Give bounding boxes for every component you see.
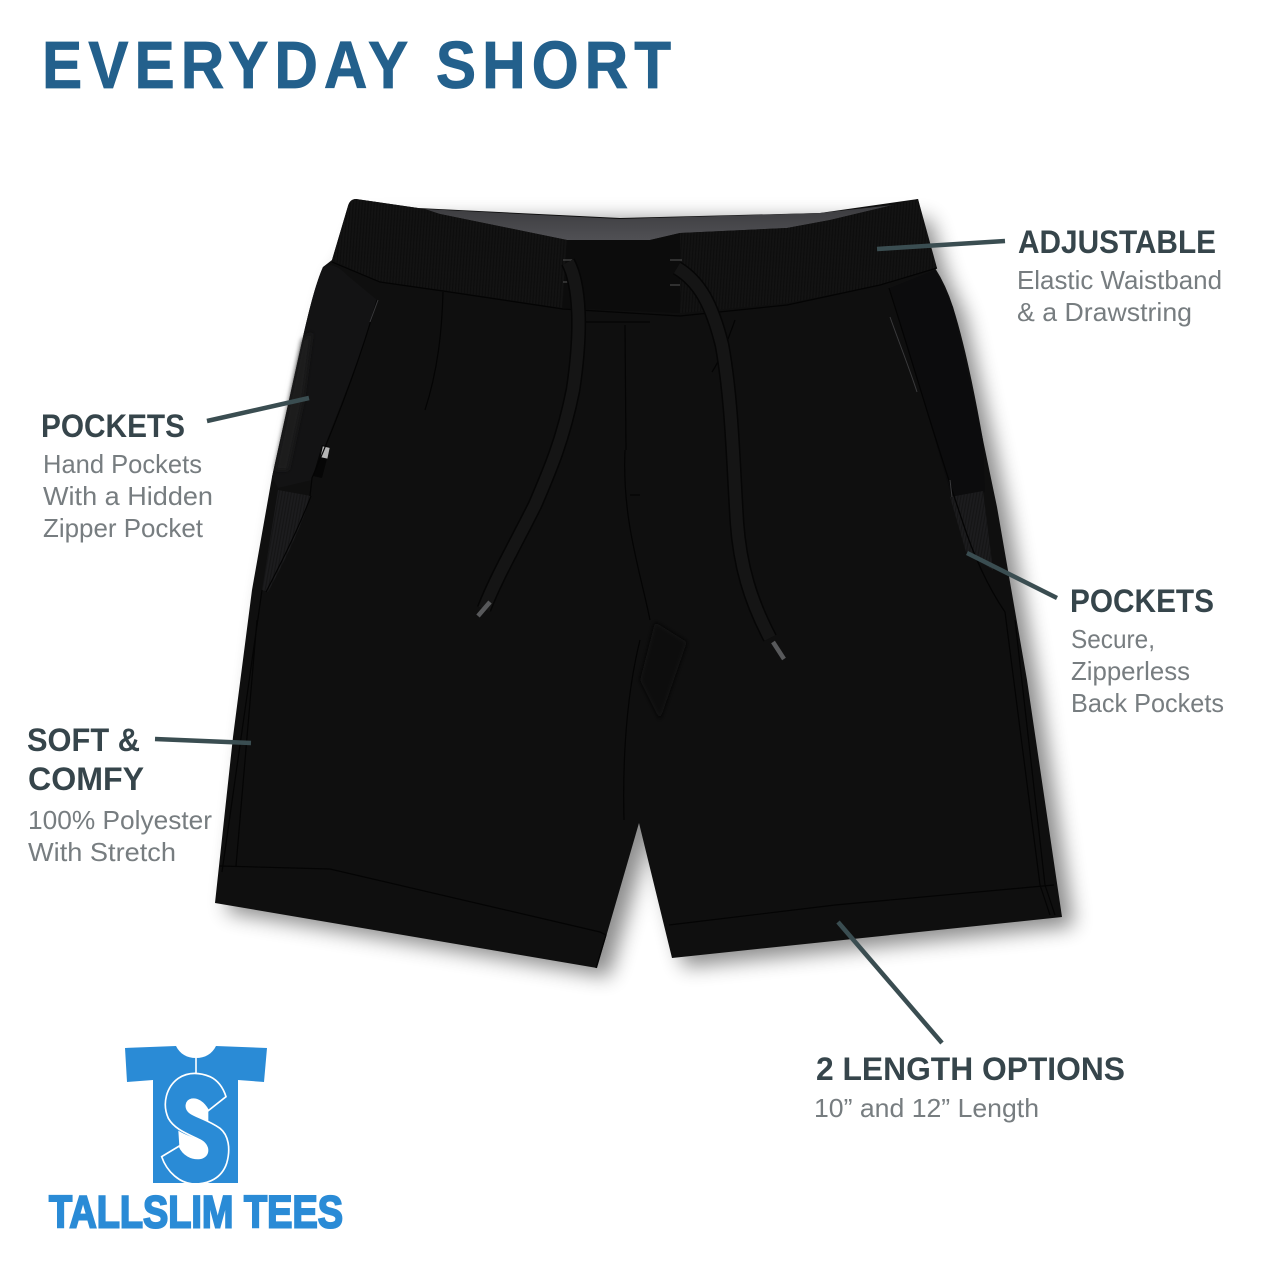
leader line [967, 553, 1057, 598]
title: EVERYDAY SHORT [42, 27, 671, 103]
right side pocket panel [890, 270, 985, 498]
description: Hand Pockets [43, 449, 202, 479]
leader line [207, 398, 309, 421]
callout: soft and comfy [27, 722, 251, 867]
waistband centre panel [563, 233, 680, 313]
pocket edge highlights [370, 300, 952, 497]
heading [27, 722, 144, 797]
garment body [215, 199, 1062, 968]
callout: length options [814, 922, 1125, 1123]
description [1017, 265, 1222, 327]
description: & a Drawstring [1017, 297, 1192, 327]
heading: ADJUSTABLE [1018, 224, 1216, 260]
heading: SOFT & [27, 722, 140, 758]
left aglet [478, 602, 490, 616]
left mesh pocket [262, 490, 311, 592]
right aglet [773, 642, 784, 659]
left drawstring [484, 262, 579, 609]
product photo: black shorts [215, 199, 1074, 977]
logo: tallslim tees [49, 1046, 343, 1238]
ribbed waistband right [680, 199, 937, 313]
description: With Stretch [28, 837, 176, 867]
description: Zipperless [1071, 656, 1190, 686]
icon: t-shirt with S [125, 1046, 267, 1184]
leader line [877, 241, 1005, 249]
leader line [838, 922, 942, 1043]
heading: 2 LENGTH OPTIONS [816, 1051, 1125, 1087]
description: Secure, [1071, 624, 1155, 654]
garment shadow [227, 219, 1074, 977]
left side pocket panel [272, 265, 377, 488]
description: Back Pockets [1071, 688, 1224, 718]
pocket tag [313, 445, 330, 478]
description [28, 805, 212, 867]
right mesh pocket [950, 491, 993, 570]
crotch fold shadow [640, 622, 687, 720]
description [43, 449, 213, 543]
heading: POCKETS [1070, 583, 1214, 619]
description: 10” and 12” Length [814, 1093, 1039, 1123]
waistband stitch tacks [563, 260, 682, 285]
description [1071, 624, 1224, 718]
callout: adjustable [877, 224, 1222, 327]
description: Elastic Waistband [1017, 265, 1222, 295]
leader line [155, 739, 251, 743]
callout: hand pockets [41, 398, 309, 543]
seams and stitching [220, 262, 1055, 968]
description: Zipper Pocket [43, 513, 204, 543]
right drawstring [677, 268, 770, 638]
heading: COMFY [28, 761, 144, 797]
description: 100% Polyester [28, 805, 212, 835]
heading: POCKETS [41, 408, 185, 444]
description: With a Hidden [43, 481, 213, 511]
inner waistband lining [425, 205, 893, 240]
callout: back pockets [967, 553, 1224, 718]
wordmark: TALLSLIM TEES [49, 1186, 343, 1238]
ribbed waistband left [332, 199, 567, 308]
